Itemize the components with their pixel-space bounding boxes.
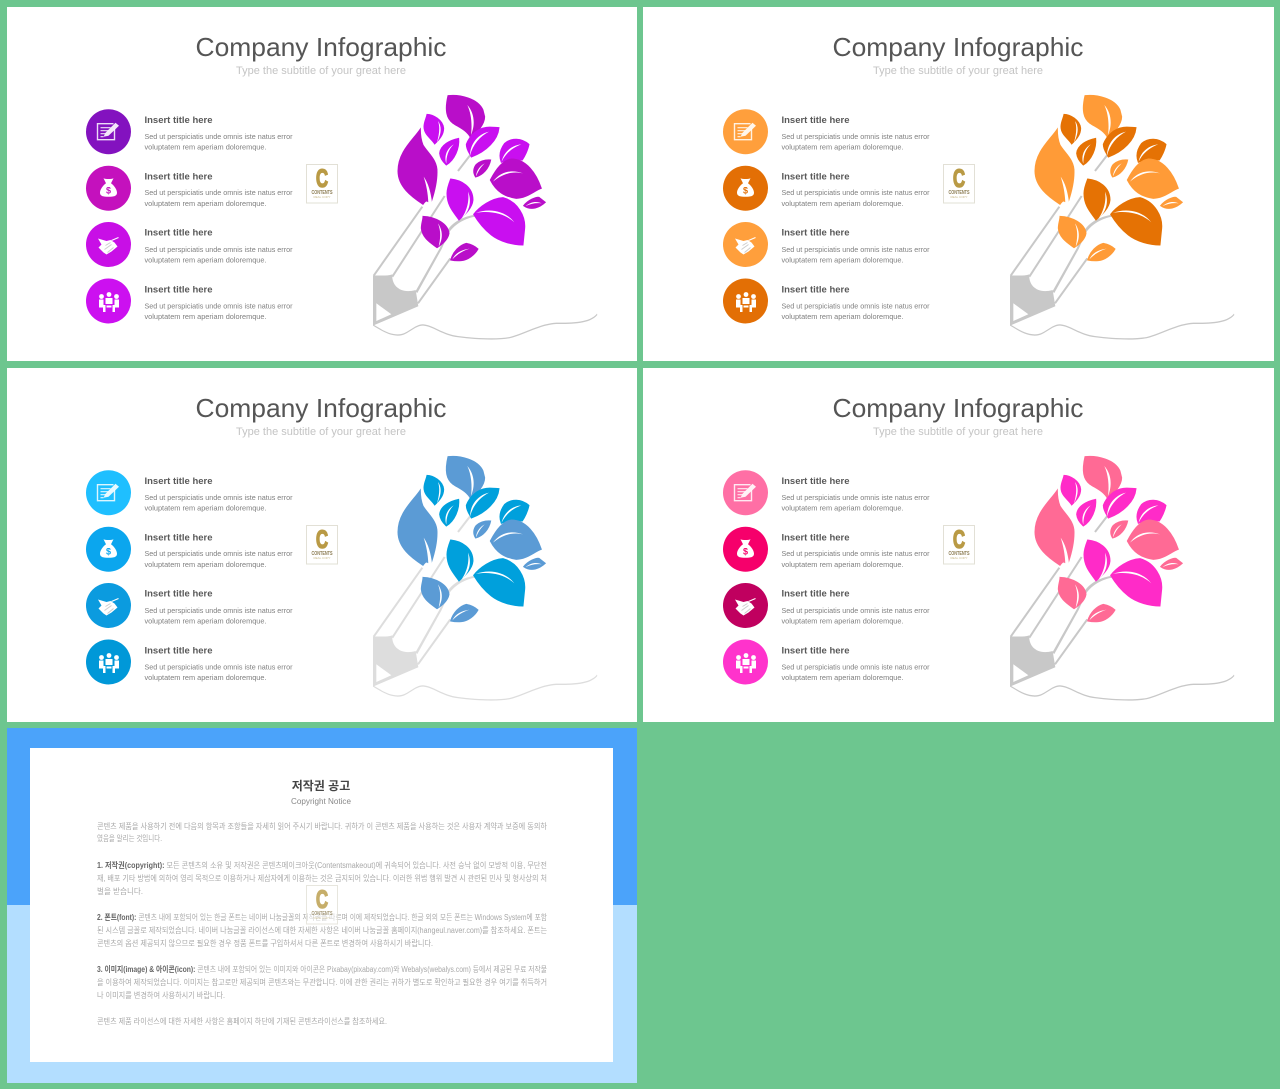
text block: item 2: voluptatem rem aperiam doloremque. [782,199,904,208]
icon: money bag: $ [743,547,748,557]
icon: handshake [86,222,131,267]
illustration: pencil tree [1010,95,1234,340]
text block: item 1: voluptatem rem aperiam doloremque. [144,504,267,513]
text block: item 4 [144,645,293,682]
text block: item 2 [782,532,930,569]
text block: item 2 [144,171,293,208]
subtitle: Type the subtitle of your great here [236,65,406,77]
subtitle: Type the subtitle of your great here [236,426,406,438]
text block: section 2 font: 2. 폰트(font): 콘텐츠 내에 포함되어 있는 한글 폰트는 네이버 나눔글꼴의 저작권을 따르며 이에 제작되었습니다. 한글 외의 모든 폰트는 Windows System에 포함 [97,912,548,922]
text block: section 3 image and icon: 나 이미지를 변경하여 사용하시기 바랍니다. [97,990,225,1000]
text block: item 1: Sed ut perspiciatis unde omnis iste natus error [782,132,930,141]
logo: REAL COPY [313,916,331,920]
icon: money bag [723,527,768,572]
logo: C [953,526,965,554]
text block: item 4: voluptatem rem aperiam doloremque. [144,673,267,682]
icon: team [86,278,131,324]
text block: item 2 [144,532,293,569]
text block: introduction: 였음을 알리는 것입니다. [97,833,162,843]
icon: money bag [86,166,131,211]
text block: section 3 image and icon: 을 이용하여 제작되었습니다. 이미지는 참고로만 제공되며 콘텐츠와는 무관합니다. 이에 관한 권리는 귀하가 별도로 확인하고 필요한 경우 여기를 취득하거 [97,977,547,987]
text block: item 4: voluptatem rem aperiam doloremque. [144,312,267,321]
text block: item 1: Sed ut perspiciatis unde omnis iste natus error [144,132,293,141]
subtitle: Type the subtitle of your great here [873,65,1043,77]
logo: C [316,526,328,554]
text block: section 3 image and icon: 3. 이미지(image) & 아이콘(icon): 콘텐츠 내에 포함되어 있는 이미지와 아이콘은 Pixabay(pixabay.com)와 Webalys(webalys.com) 등에서 제공된 무료 저작물 [97,964,547,974]
text block: item 4: Insert title here [144,645,212,656]
logo [306,164,338,203]
text block: item 4: voluptatem rem aperiam doloremque. [782,312,904,321]
text block: item 3: Insert title here [144,228,212,239]
logo [306,526,338,564]
text block: item 3 [782,589,930,626]
text block: item 2: voluptatem rem aperiam doloremque. [144,199,267,208]
subheading: Copyright Notice [291,796,351,806]
icon: handshake [723,222,768,267]
panel: purple infographic [7,7,637,361]
icon: team [723,278,768,324]
text block: item 4: Sed ut perspiciatis unde omnis iste natus error [782,662,930,671]
text block: item 2: Insert title here [782,532,850,543]
text block: section 2 font: 된 시스템 글꼴로 제작되었습니다. 네이버 나눔글꼴 라이선스에 대한 자세한 사항은 네이버 나눔글꼴 홈페이지(hangeul.naver.com)를 참조하세요. 폰트는 [97,925,547,935]
text block: section 1 copyright: 1. 저작권(copyright): 모든 콘텐츠의 소유 및 저작권은 콘텐츠메이크아웃(Contentsmakeout)에 귀속되어 있습니다. 사전 승낙 없이 모방적 이용, 무단전 [97,860,547,870]
text block: item 4: voluptatem rem aperiam doloremque. [782,673,904,682]
text block: item 2: voluptatem rem aperiam doloremque. [144,560,267,569]
panel: orange infographic [643,7,1274,361]
text block: item 1 [782,476,930,513]
text block: closing note: 콘텐츠 제품 라이선스에 대한 자세한 사항은 홈페이지 하단에 기재된 콘텐츠라이선스를 참조하세요. [97,1016,387,1026]
text block: item 1: Sed ut perspiciatis unde omnis iste natus error [782,493,930,502]
logo: C [316,165,328,193]
text block: item 1: voluptatem rem aperiam doloremque. [782,504,904,513]
text block: item 4 [144,284,293,321]
icon: money bag: $ [106,547,111,557]
text block: item 1: voluptatem rem aperiam doloremque. [782,143,904,152]
text block: item 3 [144,589,293,626]
text block: item 2 [782,171,930,208]
text block: item 1: Insert title here [782,476,850,487]
text block: section 2 font [97,912,548,948]
subtitle: Type the subtitle of your great here [873,426,1043,438]
icon: money bag [86,527,131,572]
icon: money bag: $ [106,186,111,196]
text block: item 2: Sed ut perspiciatis unde omnis iste natus error [144,188,293,197]
logo [944,526,974,564]
text block: item 3 [782,228,930,264]
icon: note and pencil [723,109,768,154]
text block: section 3 image and icon [97,964,547,1000]
icon: handshake [723,583,768,628]
text block: item 1: Insert title here [782,115,850,126]
icon: note and pencil [86,470,131,515]
text block: item 3: voluptatem rem aperiam doloremque. [782,256,904,264]
logo: REAL COPY [313,195,331,199]
logo [306,886,338,924]
logo: CONTENTS [312,551,333,557]
text block: item 2: Sed ut perspiciatis unde omnis iste natus error [782,188,930,197]
text block: item 3: voluptatem rem aperiam doloremque. [144,256,267,264]
text block: item 2: Insert title here [144,171,212,182]
panel: copyright notice [7,728,637,1083]
text block: item 1: Sed ut perspiciatis unde omnis iste natus error [144,493,293,502]
logo: C [316,886,328,914]
text block: item 2: voluptatem rem aperiam doloremque. [782,560,904,569]
text block: item 3: Sed ut perspiciatis unde omnis iste natus error [782,245,930,254]
logo: REAL COPY [313,556,331,560]
illustration: pencil tree [373,95,597,340]
title: Company Infographic [832,393,1084,423]
logo: CONTENTS [312,911,333,917]
text block: item 4: Sed ut perspiciatis unde omnis iste natus error [144,301,293,310]
icon: team [86,640,131,684]
text block: item 3: Sed ut perspiciatis unde omnis iste natus error [144,606,293,615]
text block: item 1: Insert title here [144,115,212,126]
text block: item 2: Sed ut perspiciatis unde omnis iste natus error [782,549,930,558]
text block: item 2: Insert title here [144,532,212,543]
text block: item 1 [782,115,930,152]
icon: note and pencil [723,470,768,515]
icon: money bag [723,166,768,211]
illustration: pencil tree [373,456,597,701]
logo: C [953,165,965,193]
logo: CONTENTS [948,551,970,557]
heading: copyright notice: 저작권 공고 [292,778,350,793]
logo: REAL COPY [950,195,968,199]
text block: item 3: Sed ut perspiciatis unde omnis iste natus error [144,245,293,254]
title: Company Infographic [196,393,446,423]
icon: note and pencil [86,109,131,154]
text block: item 1 [144,476,293,513]
text block: introduction [97,821,548,843]
text block: item 4: Insert title here [782,284,850,295]
icon: team [723,640,768,684]
text block: item 1: voluptatem rem aperiam doloremque. [144,143,267,152]
logo: CONTENTS [312,190,333,196]
text block: item 3 [144,228,293,264]
text block: section 1 copyright: 벌을 받습니다. [97,886,143,896]
text block: item 2: Sed ut perspiciatis unde omnis iste natus error [144,549,293,558]
logo: CONTENTS [948,190,970,196]
text block: item 3: Insert title here [782,589,850,600]
text block: item 2: Insert title here [782,171,850,182]
text block: item 4 [782,645,930,682]
text block: section 1 copyright [97,860,547,896]
text block: item 3: Insert title here [144,589,212,600]
text block: item 4: Insert title here [782,645,850,656]
text block: item 4 [782,284,930,321]
text block: item 3: voluptatem rem aperiam doloremque. [144,616,267,626]
text block: item 1: Insert title here [144,476,212,487]
text block: introduction: 콘텐츠 제품을 사용하기 전에 다음의 항목과 조항들을 자세히 읽어 주시기 바랍니다. 귀하가 이 콘텐츠 제품을 사용하는 것은 사용자 계약과 보증에 동의하 [97,821,548,831]
illustration: pencil tree [1010,456,1234,701]
title: Company Infographic [832,32,1084,62]
text block: item 3: Insert title here [782,228,850,239]
logo: REAL COPY [950,556,968,560]
icon: handshake [86,583,131,628]
text block: item 3: voluptatem rem aperiam doloremque. [782,616,904,626]
text block: item 1 [144,115,293,152]
panel: pink infographic [643,368,1274,722]
text block: section 1 copyright: 재, 배포 기타 방법에 의하여 영리 목적으로 이용하거나 제삼자에게 이용하는 것은 금지되어 있습니다. 이러한 위법 행위 발견 시 관련된 민사 및 형사상의 처 [97,873,547,883]
text block: item 3: Sed ut perspiciatis unde omnis iste natus error [782,606,930,615]
text block: item 4: Sed ut perspiciatis unde omnis iste natus error [782,301,930,310]
logo [944,164,974,203]
text block: section 2 font: 콘텐츠의 옵션 제공되지 않으므로 필요한 경우 정품 폰트를 구입하셔서 다른 폰트로 변경하여 사용하시기 바랍니다. [97,938,433,948]
icon: money bag: $ [743,186,748,196]
text block: item 4: Insert title here [144,284,212,295]
text block: item 4: Sed ut perspiciatis unde omnis iste natus error [144,662,293,671]
panel: blue infographic [7,368,637,722]
title: Company Infographic [196,32,446,62]
